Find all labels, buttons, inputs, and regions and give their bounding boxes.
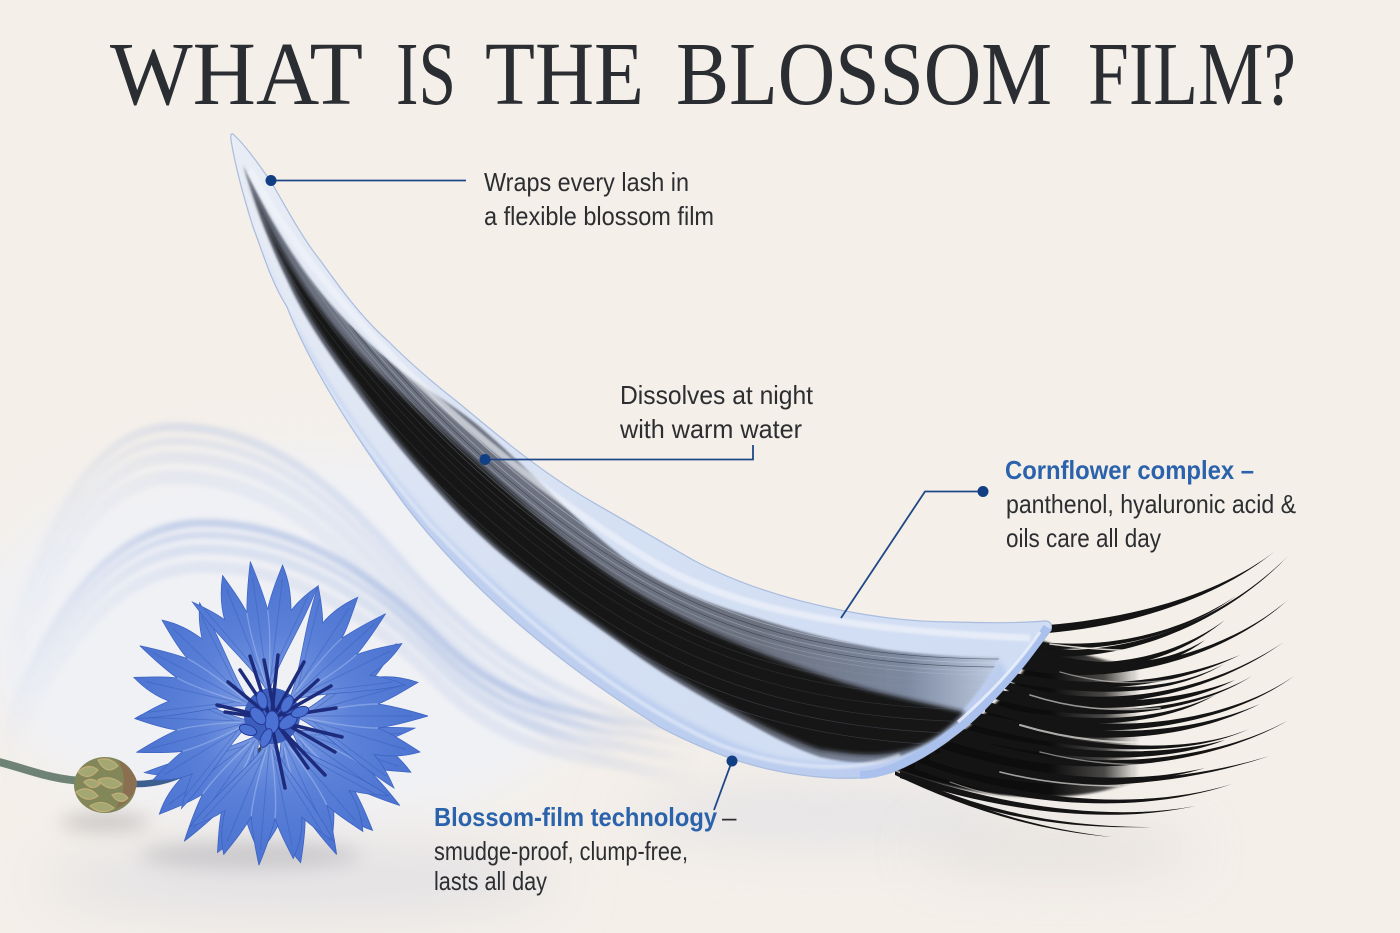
film body: [231, 134, 1051, 778]
callout text: [1005, 455, 1296, 553]
callout text: [484, 167, 714, 231]
title: IS: [396, 25, 456, 124]
lash highlights: [950, 644, 1170, 800]
blue stem segment: [125, 773, 185, 784]
callout text: smudge-proof, clump-free,: [434, 836, 688, 866]
stem: [0, 761, 85, 781]
lash mass at film edge: [890, 640, 1148, 797]
blue blossom wisps: [0, 427, 770, 814]
film lower saturated band: [296, 328, 1006, 778]
film outline: [231, 134, 1051, 778]
background soft light and shadows: [0, 450, 1200, 916]
callout text: Wraps every lash in: [484, 167, 689, 197]
title: [110, 25, 1296, 124]
callout: wraps every lash: [266, 167, 714, 231]
stamens: [217, 655, 342, 788]
individual lash strands: [895, 552, 1294, 837]
callout text: Dissolves at night: [620, 380, 814, 410]
lash black core: [245, 172, 965, 755]
callout text: panthenol, hyaluronic acid &: [1006, 489, 1296, 519]
callout text: Blossom-film technology: [434, 802, 717, 832]
film bottom highlight: [308, 350, 901, 770]
callout text: lasts all day: [434, 866, 547, 896]
callout text: [619, 380, 814, 444]
lash fine streaks: [250, 185, 999, 744]
flower heart: [217, 655, 342, 788]
callout text: a flexible blossom film: [484, 201, 714, 231]
film top highlight: [250, 170, 1030, 638]
callout leader: [480, 445, 753, 465]
callout leader: [841, 486, 988, 618]
callout leader: [714, 756, 738, 810]
lash mid tone: [243, 165, 1000, 763]
callout text: oils care all day: [1006, 523, 1161, 553]
callout: cornflower complex: [841, 455, 1296, 618]
cornflower: [0, 553, 441, 885]
callout text: Cornflower complex –: [1005, 455, 1254, 485]
callout: blossom-film technology: [434, 756, 738, 896]
flower core florets: [238, 690, 310, 749]
title: THE: [485, 25, 644, 124]
lash fan: free lash ends: [890, 552, 1294, 837]
petals: [109, 553, 441, 885]
callout text: with warm water: [619, 414, 802, 444]
flower dark gap: [236, 745, 262, 781]
flower bud: [74, 757, 137, 813]
blossom film capsule: [230, 134, 1051, 800]
callout text: –: [722, 802, 737, 832]
callout text: [434, 802, 737, 896]
callout leader: [266, 175, 466, 186]
title: FILM?: [1088, 25, 1296, 124]
callout: dissolves at night: [480, 380, 814, 465]
title: WHAT: [110, 25, 363, 124]
film end rim: [860, 627, 1047, 775]
title: BLOSSOM: [676, 25, 1052, 124]
